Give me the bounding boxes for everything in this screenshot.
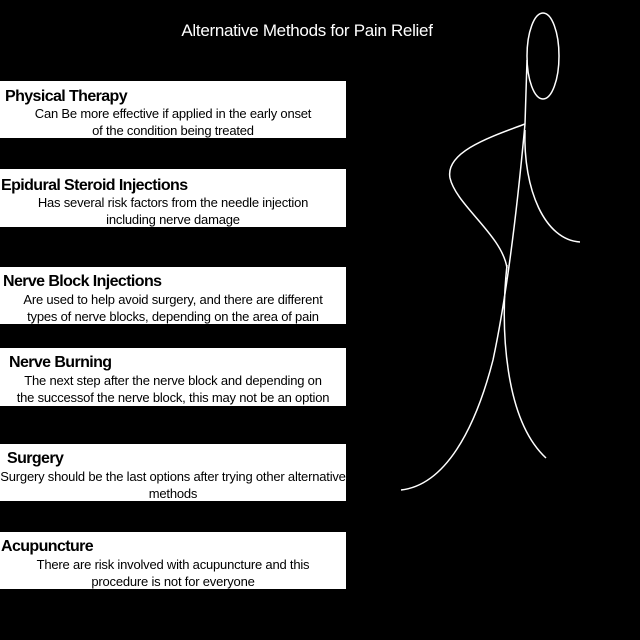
text: surgery	[0, 469, 346, 501]
text: epidural: Has several risk factors from the needle injection	[38, 195, 308, 210]
text: surgery: Surgery should be the last options after trying other alternative	[0, 469, 346, 484]
panel: acupuncture	[0, 532, 346, 589]
heading: epidural: Epidural Steroid Injections	[1, 177, 188, 194]
panel: surgery	[0, 444, 346, 501]
text: nerve block	[23, 292, 323, 324]
text: nerve burning: The next step after the nerve block and depending on	[24, 373, 322, 388]
text: physical therapy: Can Be more effective if applied in the early onset	[35, 106, 311, 121]
heading: acupuncture: Acupuncture	[1, 538, 93, 555]
text: physical therapy	[35, 106, 312, 138]
panel: nerve block injections	[0, 267, 346, 324]
text: nerve burning	[16, 373, 329, 405]
text: acupuncture: procedure is not for everyone	[91, 574, 255, 589]
text: acupuncture: There are risk involved with acupuncture and this	[37, 557, 309, 572]
text: acupuncture	[36, 557, 309, 589]
heading: surgery: Surgery	[7, 450, 63, 467]
text: nerve block: types of nerve blocks, depending on the area of pain	[27, 309, 319, 324]
panel: epidural steroid injections	[0, 169, 346, 227]
heading: physical therapy: Physical Therapy	[5, 88, 127, 105]
heading: nerve burning: Nerve Burning	[9, 354, 111, 371]
text: nerve block: Are used to help avoid surgery, and there are different	[23, 292, 323, 307]
panel: nerve burning	[0, 348, 346, 406]
text: epidural: including nerve damage	[106, 212, 240, 227]
title: Alternative Methods for Pain Relief	[181, 21, 433, 40]
heading: nerve block: Nerve Block Injections	[3, 273, 161, 290]
text: nerve burning: the successof the nerve block, this may not be an option	[17, 390, 329, 405]
text: epidural	[38, 195, 308, 227]
text: physical therapy: of the condition being treated	[92, 123, 254, 138]
panel: physical therapy	[0, 81, 346, 138]
text: surgery: methods	[149, 486, 197, 501]
